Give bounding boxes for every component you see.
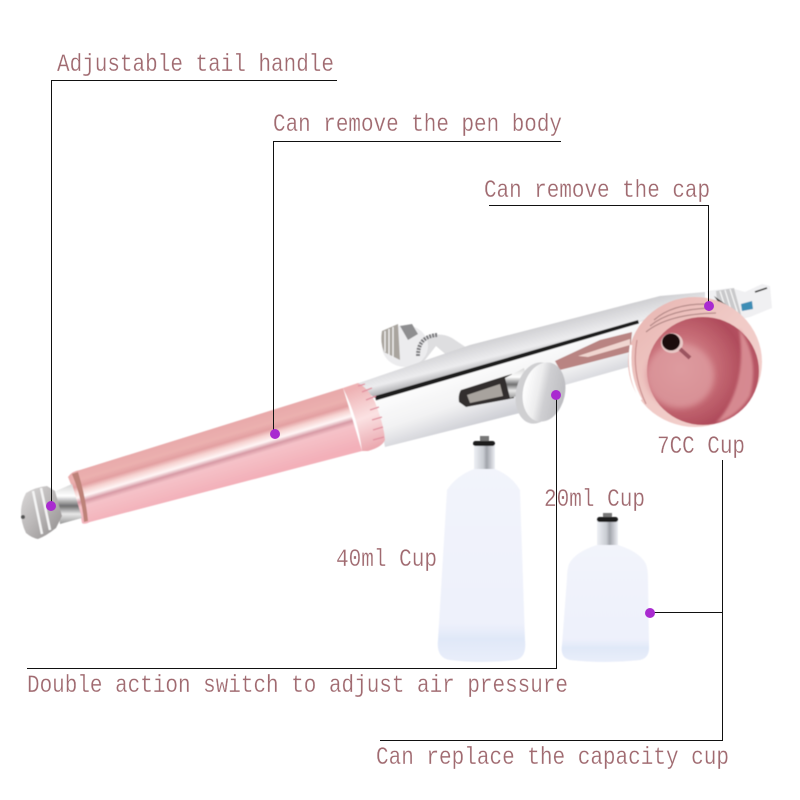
- cup bowl highlight: [646, 344, 714, 408]
- callout: adjustable tail handle: Adjustable tail handle: [57, 50, 334, 79]
- tail knob: [21, 486, 62, 539]
- callout: remove cap: [484, 176, 714, 311]
- callout: remove pen body: [270, 110, 562, 439]
- airbrush pen: [21, 284, 772, 539]
- slot in body: [459, 374, 514, 407]
- tube end shadow: [72, 472, 88, 522]
- cup hole: [661, 333, 683, 353]
- label: 40ml cup: 40ml Cup: [336, 545, 437, 574]
- rear cap fitting: [707, 284, 772, 323]
- collar: [343, 383, 385, 451]
- silver upper barrel: [356, 292, 705, 398]
- callout: adjustable tail handle: [46, 50, 337, 511]
- label: 7CC cup: 7CC Cup: [657, 432, 745, 461]
- label: 20ml cup: 20ml Cup: [544, 485, 645, 514]
- black stripe: [375, 320, 639, 400]
- 40ml cup: [438, 436, 525, 662]
- air valve fitting: [381, 324, 470, 367]
- silver lower body: [375, 322, 640, 447]
- paint cup: [628, 297, 762, 427]
- callout: double action switch: Double action switch to adjust air pressure: [27, 671, 568, 700]
- trigger button: [510, 358, 564, 428]
- silver neck: [56, 484, 82, 524]
- trigger stem: [505, 368, 530, 398]
- callout: replace capacity cup: [376, 460, 729, 772]
- 20ml cup: [562, 513, 649, 662]
- pink reflection: [555, 332, 632, 370]
- callout: replace capacity cup: Can replace the capacity cup: [376, 743, 729, 772]
- callout: remove pen body: Can remove the pen body: [273, 110, 562, 139]
- callout: double action switch: [27, 390, 568, 700]
- pink tube: [68, 388, 362, 524]
- callout: remove cap: Can remove the cap: [484, 176, 710, 205]
